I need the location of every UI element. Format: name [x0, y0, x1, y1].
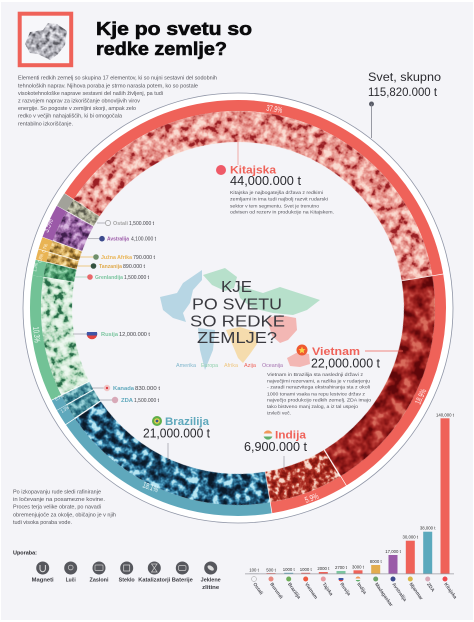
bar country names: Madagaskar [373, 582, 394, 608]
bar values: 1000 t [283, 567, 295, 572]
callout: Kitajska: zemljami in ima tudi najbolj razvit rudarski [230, 197, 328, 203]
world total callout: Svet, skupno [368, 72, 441, 84]
label: Ostali: 1,500.000 t [129, 221, 155, 227]
icon: magnets [32, 562, 54, 584]
callout: Vietnam: 1000 tonami vsaka na repu lestvice držav z [267, 391, 366, 397]
center title: KJE [221, 279, 252, 296]
icon: steel alloys: zlitine [202, 585, 219, 591]
percentage labels on the ring [31, 103, 428, 505]
label: ZDA: ZDA [121, 398, 133, 404]
callout: Vietnam: izvleči več. [267, 410, 291, 416]
icon: lights [64, 562, 77, 584]
label: Grenlandija: 1,500.000 t [124, 275, 150, 281]
callout: Vietnam [267, 344, 403, 416]
label: Grenlandija [75, 274, 150, 281]
callout: Kitajska: sektor v tem segmentu. Svet je trenutno [230, 203, 319, 209]
refining text block: Proces terja velike obrate, po navadi [13, 505, 101, 511]
world total callout: 115,820.000 t [368, 87, 438, 99]
icon: steel alloys [201, 562, 221, 591]
callout: Kitajska: odvisen od rezerv in produkcije na Kitajskem. [230, 210, 334, 216]
icon: catalysts: Katalizatorji [138, 578, 171, 584]
bar flags [252, 576, 448, 582]
label: Tanzanija: Tanzanija [99, 264, 122, 270]
icon: glass: Steklo [119, 578, 135, 584]
label: Avstralija: 4,100.000 t [131, 237, 157, 243]
map legend: Afrika [224, 363, 238, 369]
bar country names: Ostali [251, 582, 264, 596]
label: Kanada: Kanada [113, 386, 134, 392]
callout: Vietnam: največjimi rezervami, a razlika je v rudarjenju [267, 378, 370, 384]
map legend: Amerika [176, 363, 196, 369]
map legend: Europa [201, 363, 218, 369]
bar values: 38,000 t [420, 526, 436, 531]
bar values [249, 412, 455, 572]
bar country names: Tajska [321, 582, 334, 597]
label: Južna Afrika: 790.000 t [133, 255, 156, 261]
icon: catalysts [138, 562, 171, 584]
bar values: 3000 t [352, 564, 365, 570]
label: ZDA [100, 397, 160, 404]
label: ZDA: 1,500.000 t [134, 398, 160, 404]
callout: Vietnam: 22,000.000 t [311, 356, 381, 370]
label: Južna Afrika [80, 254, 156, 261]
callout: Kitajska: Kitajska je najbogatejša država z redkimi [230, 190, 323, 196]
callout: Vietnam: Vietnam in Brazilija sta naslednji državi z [267, 372, 364, 378]
world total callout [368, 72, 441, 138]
bar country names: Vietnam [303, 582, 319, 600]
bar country names: Kitajska [442, 582, 458, 600]
bar country names: Burundi [268, 582, 284, 600]
left country labels [73, 220, 161, 404]
icon: steel alloys: Jeklene [201, 578, 221, 584]
map legend [176, 363, 283, 369]
center title: PO SVETU [192, 296, 282, 314]
callout: Kitajska [216, 140, 334, 216]
center title: ZEMLJE? [197, 330, 277, 347]
intro text block: energije. So pogoste v zemljini skorji, ampak zelo [18, 106, 136, 112]
percentage labels on the ring: 3.5% [41, 217, 55, 234]
center title [190, 279, 285, 347]
bar values: 1000 t [300, 567, 312, 572]
header image: metal rock in red frame [20, 14, 71, 65]
percentage labels on the ring: 5.9% [303, 491, 320, 505]
label: Tanzanija: 890.000 t [123, 264, 146, 270]
bar country names: Avstralija [390, 582, 408, 603]
icon: batteries [172, 562, 193, 584]
intro text block: visokotehnološke naprave sestavni del naših življenj, pa tudi [18, 91, 163, 97]
label: Tanzanija [78, 263, 146, 270]
center title: SO REDKE [190, 314, 285, 330]
callout: Vietnam: Vietnam [312, 346, 360, 358]
percentage labels on the ring: 37.9% [266, 103, 283, 115]
title [96, 19, 252, 59]
intro text block: z razvojem naprav za izkoriščanje obnovljivih virov [18, 98, 140, 104]
bar country names: Brazilija [286, 582, 302, 600]
map legend: Oceanija [262, 363, 283, 369]
callout: Brazilija: 21,000.000 t [143, 426, 210, 440]
label: Južna Afrika: Južna Afrika [101, 255, 132, 261]
percentage labels on the ring: 0.7% [41, 243, 50, 254]
bar values: 2700 t [335, 565, 348, 570]
intro text block: Elementi redkih zemelj so skupina 17 elementov, ki so nujni sestavni del sodobnih [18, 76, 217, 82]
bar country names: Rusija [338, 582, 352, 597]
callout: Indija: Indija [275, 430, 307, 442]
percentage labels on the ring: 0.7% [54, 393, 65, 403]
refining text block: Po izkopavanju rude sledi rafiniranje [13, 490, 101, 496]
label: Grenlandija: Grenlandija [95, 275, 123, 281]
refining text block: obremenjujoče za okolje, običajno je v njih [13, 512, 116, 518]
label: Rusija: Rusija [101, 332, 118, 338]
intro text block [18, 76, 217, 127]
refining text block: tudi visoka poraba vode. [13, 520, 72, 526]
bar values: 140,000 t [436, 412, 455, 418]
bar values: 8000 t [370, 559, 382, 564]
label: Ostali [97, 220, 155, 227]
bar country names: ZDA [425, 582, 436, 594]
bar values: 100 t [249, 568, 260, 572]
label: Rusija: 12,000.000 t [119, 332, 151, 338]
intro text block: redko v večjih nahajališčih, ki bi omogočala [18, 114, 122, 120]
icon: magnets: Magneti [32, 578, 54, 584]
bar country names: Mjanmar [408, 582, 424, 601]
callout: Vietnam: tako bistveno manj zalog, a iz tal uspejo [267, 404, 358, 410]
percentage labels on the ring: 1.3% [60, 405, 71, 415]
callout: Vietnam: največjo produkcijo redkih zemelj. ZDA imajo [267, 398, 371, 404]
bars [245, 418, 454, 574]
icon: screens [90, 562, 109, 584]
bar country names: Indija [355, 582, 368, 596]
bar values: 30,000 t [403, 535, 419, 540]
callout: Indija [244, 430, 308, 470]
percentage labels on the ring: 0.8% [37, 253, 46, 264]
label: Rusija [73, 329, 151, 339]
bar country names [251, 582, 458, 608]
callout: Brazilija: Brazilija [165, 416, 210, 428]
percentage labels on the ring: 1.3% [32, 262, 40, 272]
intro text block: rentabilno izkoriščanje. [18, 121, 73, 127]
refining text block: in ločevanje na posamezne kovine. [13, 497, 105, 503]
percentage labels on the ring: 10.3% [31, 326, 43, 343]
percentage labels on the ring: 18.1% [141, 479, 160, 494]
icon: batteries: Baterije [172, 578, 193, 584]
label: Avstralija [88, 236, 157, 243]
uses icons [32, 562, 221, 591]
bar values: 2000 t [317, 566, 330, 571]
label: Ostali: Ostali [113, 221, 129, 227]
label: Kanada: 830.000 t [135, 386, 161, 392]
label: Avstralija: Avstralija [107, 237, 129, 243]
callout: Kitajska: 44,000.000 t [230, 174, 302, 188]
callout: Brazilija [143, 416, 210, 460]
icon: lights: Luči [66, 578, 76, 584]
label: Kanada [92, 385, 161, 392]
callout: Indija: 6,900.000 t [244, 440, 308, 454]
intro text block: tehnoloških naprav. Njihova poraba je strmo narasla potem, ko so postale [18, 83, 198, 89]
icon: glass [119, 562, 135, 584]
title: Kje po svetu so [96, 19, 252, 39]
icon: screens: Zasloni [90, 578, 109, 584]
bar values: 17,000 t [385, 549, 402, 554]
map legend: Azija [244, 363, 256, 369]
title: redke zemlje? [96, 39, 227, 59]
refining text block [13, 490, 116, 526]
callout: Kitajska: Kitajska [230, 164, 277, 176]
callout: Vietnam: - zaradi nerazvitega ekstrahiranja sta z okoli [267, 385, 370, 391]
world map [160, 268, 320, 370]
bar chart: production by country [245, 412, 458, 608]
bar values: 500 t [266, 568, 277, 572]
uses heading: Uporaba: [13, 551, 37, 557]
percentage labels on the ring: 18.9% [413, 387, 428, 406]
